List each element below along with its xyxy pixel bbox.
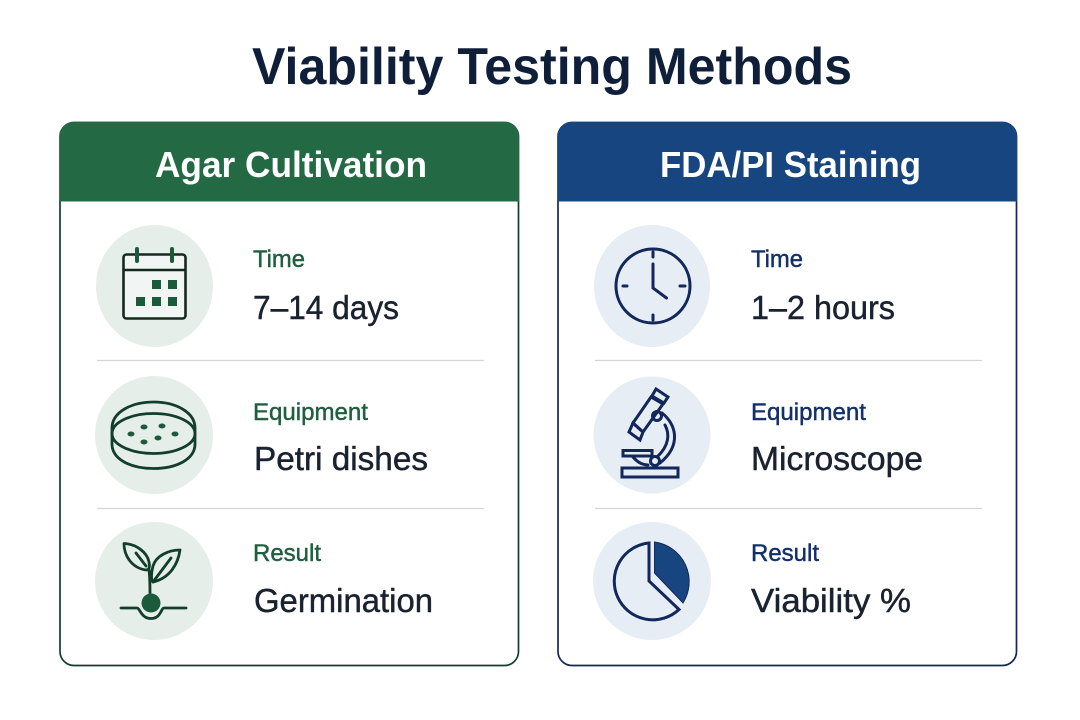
row: result — [95, 522, 433, 640]
value: Germination: Germination — [254, 582, 433, 619]
label: Result: Result — [751, 540, 819, 567]
label: Equipment: Equipment — [253, 399, 368, 426]
title: Viability Testing Methods — [252, 38, 852, 96]
label: Result: Result — [253, 540, 321, 567]
icon: petri dish — [112, 402, 195, 468]
label: Time: Time — [751, 246, 803, 273]
label: Time: Time — [253, 246, 305, 273]
panel header: FDA/PI Staining — [558, 122, 1017, 202]
row: equipment — [594, 376, 923, 494]
label: Equipment: Equipment — [751, 399, 866, 426]
value: Viability %: Viability % — [751, 582, 911, 619]
panel header: Agar Cultivation — [60, 122, 519, 202]
row: time — [594, 225, 895, 347]
icon: microscope — [622, 389, 678, 477]
panel: Agar Cultivation — [60, 122, 519, 666]
row: time — [96, 225, 399, 347]
value: Microscope: Microscope — [751, 440, 923, 477]
icon: seedling — [121, 544, 186, 618]
icon: clock — [616, 249, 690, 323]
icon: pie chart — [614, 542, 689, 620]
panel header: Agar Cultivation: Agar Cultivation — [155, 144, 427, 185]
value: 1–2 hours: 1–2 hours — [751, 289, 895, 326]
panel: FDA/PI Staining — [558, 122, 1017, 666]
row: equipment — [95, 376, 428, 494]
row: result — [593, 522, 911, 640]
value: 7–14 days: 7–14 days — [253, 289, 399, 326]
icon: calendar — [124, 249, 186, 318]
panel header: FDA/PI Staining: FDA/PI Staining — [660, 144, 921, 185]
value: Petri dishes: Petri dishes — [254, 440, 428, 477]
